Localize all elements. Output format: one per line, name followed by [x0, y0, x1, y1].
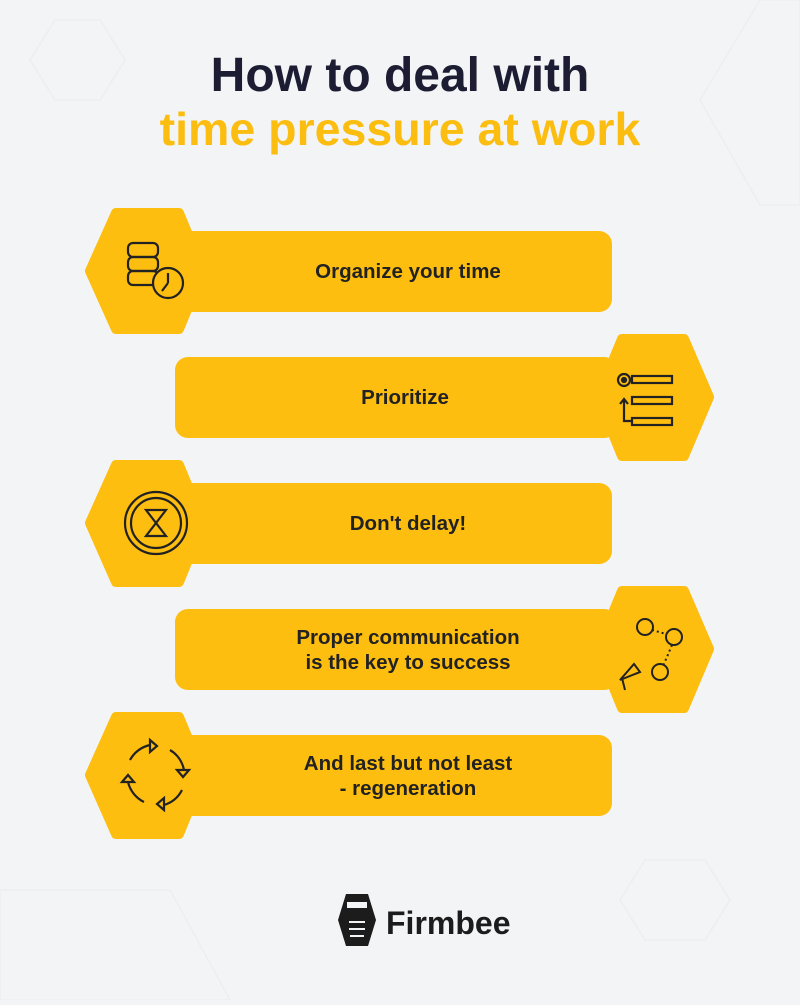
icon: people network [620, 619, 682, 690]
icon: hourglass clock [125, 492, 187, 554]
step 1: organize [90, 213, 612, 329]
text [304, 752, 512, 800]
title: time pressure at work [160, 103, 640, 155]
text: Don't delay! [350, 512, 466, 535]
text: is the key to success [305, 651, 511, 674]
step 4: communication [175, 591, 709, 708]
logo: Firmbee [338, 894, 510, 946]
text: Organize your time [315, 260, 501, 283]
text: Proper communication [296, 626, 520, 649]
step 2: prioritize [175, 339, 709, 456]
icon: priority list [618, 374, 672, 425]
title: How to deal with [211, 49, 589, 102]
text: - regeneration [340, 777, 476, 800]
text: And last but not least [304, 752, 512, 775]
title [160, 49, 640, 155]
text: Prioritize [361, 386, 449, 409]
icon: cycle arrows [122, 740, 189, 810]
step 3: don't delay [90, 465, 612, 582]
step 5: regeneration [90, 717, 612, 834]
icon: database clock [128, 243, 183, 298]
logo: Firmbee: Firmbee [386, 905, 510, 941]
text [296, 626, 520, 674]
